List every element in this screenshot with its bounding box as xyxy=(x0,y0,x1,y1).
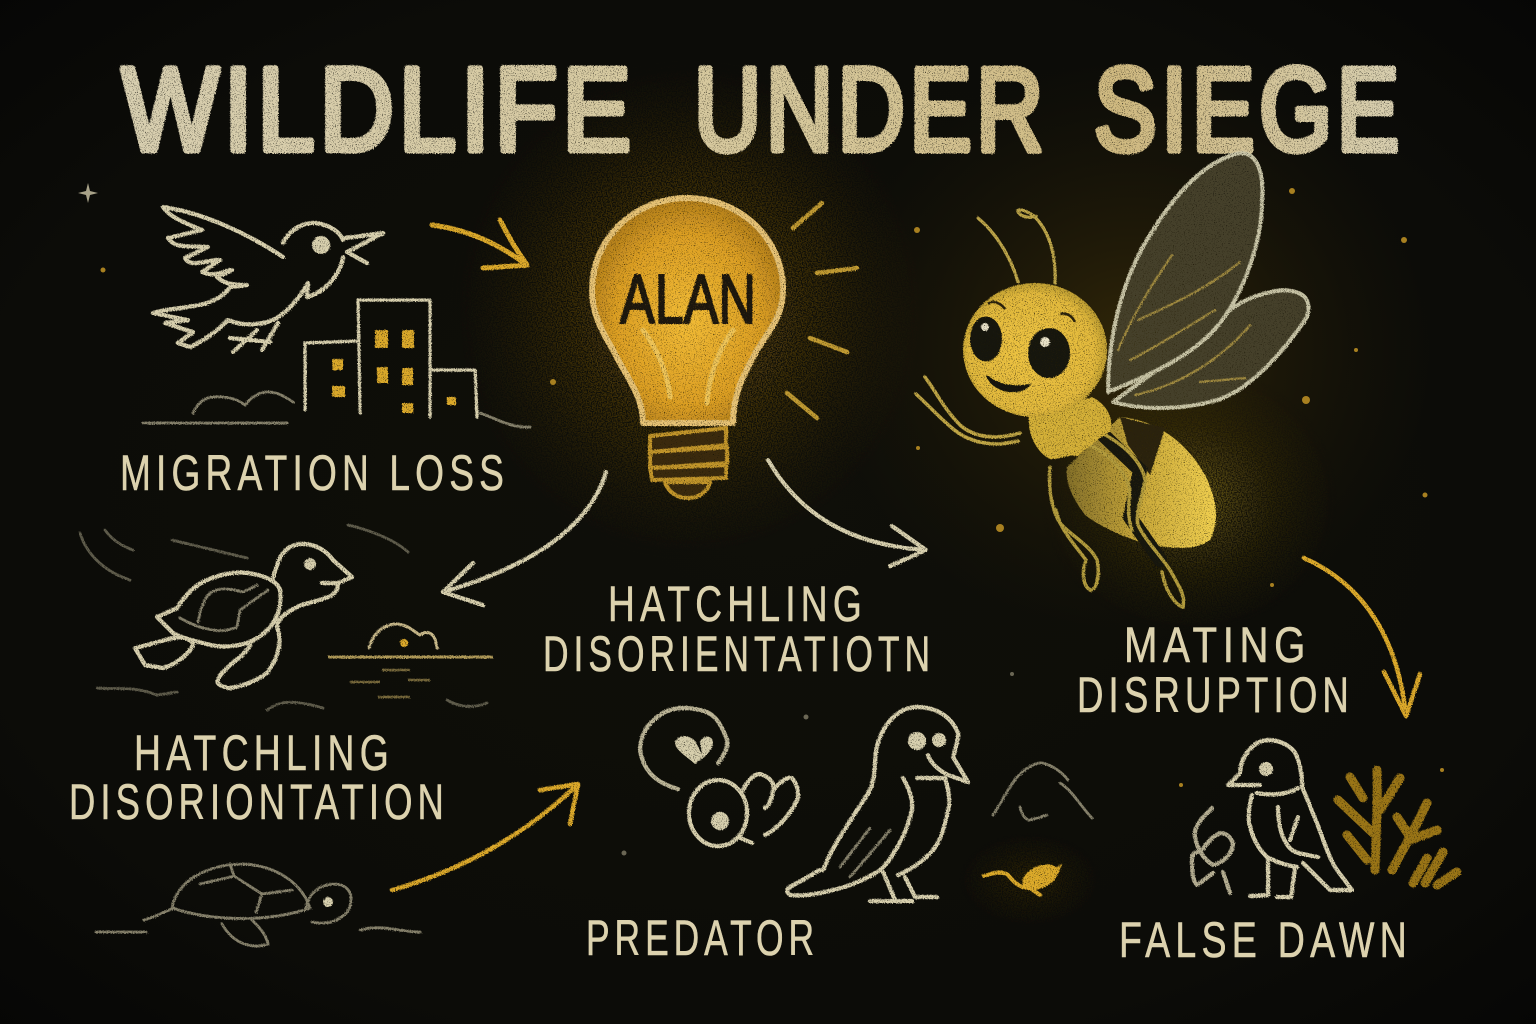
icon: light bulb xyxy=(592,198,783,498)
icon: city buildings xyxy=(143,300,530,427)
icon: bird xyxy=(153,207,383,352)
specks of light xyxy=(100,188,1444,787)
bulb base xyxy=(650,428,727,498)
title: WILDLIFE xyxy=(122,44,636,176)
arrow: bulb to hatchling xyxy=(768,460,926,566)
firefly thorax xyxy=(1029,397,1111,459)
glow: light bulb xyxy=(450,60,930,560)
icon: predator bird xyxy=(787,707,968,901)
bulb label: ALAN: ALAN xyxy=(620,260,756,338)
firefly abdomen xyxy=(1067,417,1216,548)
icon: firefly xyxy=(916,153,1309,607)
specks of chalk xyxy=(622,672,1014,856)
glow: mouse xyxy=(955,830,1105,930)
arrow: bulb to turtle xyxy=(443,472,606,605)
firefly upper wing xyxy=(1108,153,1262,392)
firefly mouth xyxy=(987,376,1029,391)
icon: light rays xyxy=(787,203,857,418)
firefly eyes xyxy=(970,316,1002,362)
title xyxy=(122,44,1404,176)
arrow: turtle to predator xyxy=(392,784,578,890)
firefly antennae and arm xyxy=(978,210,1055,283)
icon: moth xyxy=(689,774,798,846)
icon: small bird and plant xyxy=(1192,740,1457,897)
label: migration loss: MIGRATION LOSS xyxy=(120,445,509,501)
title: SIEGE xyxy=(1094,44,1404,176)
label: hatchling disoriontation left: HATCHLING xyxy=(134,725,394,781)
label: hatchling disorientation center xyxy=(543,576,935,682)
label: mating disruption xyxy=(1077,617,1354,723)
hatchling on horizon xyxy=(369,624,437,648)
icon: sparkle xyxy=(78,183,98,203)
label: hatchling disorientation center: HATCHLING xyxy=(608,576,867,632)
firefly head xyxy=(963,283,1107,417)
label: false dawn: FALSE DAWN xyxy=(1119,912,1412,968)
label: mating disruption: MATING xyxy=(1124,617,1311,673)
arrow: firefly to false dawn xyxy=(1304,558,1420,716)
icon: mound xyxy=(993,763,1092,820)
glow: firefly abdomen xyxy=(1035,360,1345,640)
label: hatchling disorientation center: DISORIENTATIOTN xyxy=(543,626,935,682)
label: mating disruption: DISRUPTION xyxy=(1077,667,1354,723)
firefly legs xyxy=(1098,430,1160,560)
label: hatchling disoriontation left: DISORIONTATION xyxy=(69,774,449,830)
icon: sea turtle with hatchling xyxy=(80,525,493,710)
firefly lower wing xyxy=(1113,290,1309,408)
title: UNDER xyxy=(694,44,1048,176)
glow: firefly wide xyxy=(830,60,1430,640)
icon: heart bubble xyxy=(640,708,727,789)
label: hatchling disoriontation left xyxy=(69,725,449,830)
icon: land turtle xyxy=(96,864,420,946)
panel: migration loss xyxy=(120,207,530,501)
icon: mouse xyxy=(984,859,1062,895)
arrow: migration to bulb xyxy=(432,220,527,268)
label: predator: PREDATOR xyxy=(586,910,819,966)
